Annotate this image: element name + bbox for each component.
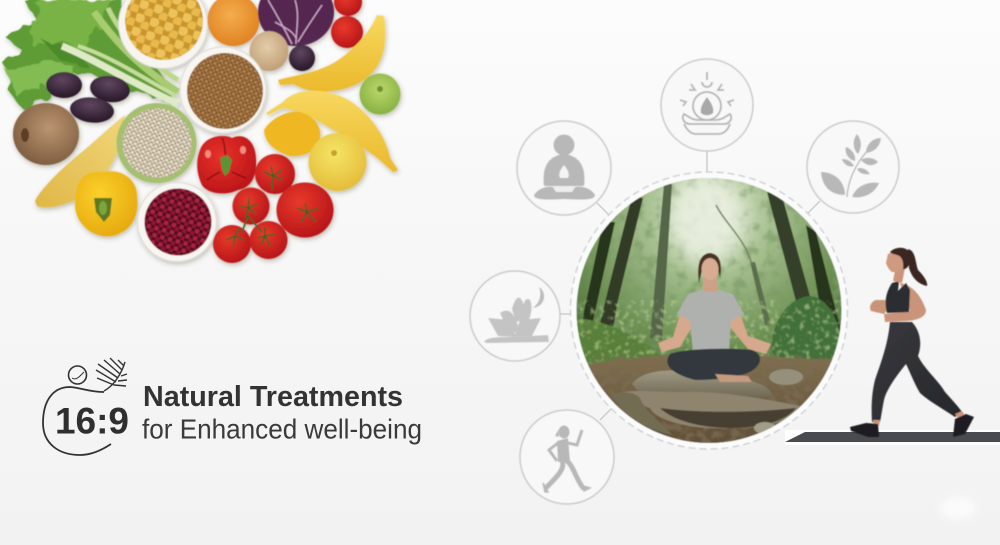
orange	[208, 0, 260, 46]
logo number: 16:9	[55, 400, 129, 442]
tomato stems	[226, 166, 318, 246]
undergrowth left	[576, 318, 658, 364]
walking woman	[850, 248, 974, 437]
green apple	[360, 74, 400, 114]
large tomato	[276, 182, 334, 238]
icon: plant sprig	[807, 121, 899, 213]
shirt	[677, 290, 744, 354]
crossed legs	[667, 349, 760, 380]
dashed ring	[570, 172, 848, 449]
forest backdrop	[570, 170, 850, 450]
heading: Natural Treatments	[143, 381, 403, 413]
tomato 2	[232, 188, 270, 224]
front forearm and fist	[870, 300, 889, 314]
icon: meditating figure with flame	[517, 121, 611, 215]
tree trunks	[578, 184, 842, 340]
icon: flame on lotus bowl	[661, 59, 753, 151]
food arrangement	[4, 0, 400, 263]
back arm	[884, 283, 926, 322]
face	[886, 252, 905, 272]
neck	[893, 266, 905, 283]
tomato 4	[250, 221, 288, 259]
tomato 1	[255, 154, 295, 194]
tomato top 2	[331, 16, 363, 48]
front shoe	[850, 423, 879, 437]
celery stalks	[94, 12, 178, 92]
foot	[715, 374, 752, 382]
crop top	[886, 281, 910, 313]
lettuce	[4, 0, 178, 108]
central forest meditation photo	[570, 170, 850, 450]
leaf texture	[577, 300, 842, 364]
undergrowth right	[772, 296, 840, 360]
lentil bowl	[180, 47, 266, 133]
lower rock	[612, 391, 800, 428]
yellow squash	[264, 112, 320, 156]
rock shadow	[660, 408, 796, 428]
tomato top 1	[334, 0, 362, 16]
icon: lotus and moon	[470, 271, 560, 361]
neck	[703, 278, 717, 292]
plum	[289, 45, 315, 71]
eggplants	[46, 72, 132, 125]
banana top right	[278, 15, 385, 91]
foliage texture	[577, 178, 841, 355]
face	[702, 258, 718, 280]
logo and title	[43, 358, 422, 455]
banana left	[35, 115, 125, 207]
mat	[785, 430, 1000, 445]
palm leaf icon	[96, 358, 127, 391]
kiwi	[13, 103, 79, 165]
right small rock	[769, 369, 803, 385]
faint watermark blob	[940, 497, 976, 519]
misty glow	[668, 175, 744, 265]
green bean bowl	[116, 103, 196, 183]
pomegranate bowl	[138, 182, 216, 262]
chickpea bowl	[118, 0, 208, 68]
yellow bell pepper	[75, 171, 137, 236]
ponytail	[908, 249, 927, 286]
red cabbage	[258, 0, 334, 46]
connector lines	[560, 151, 820, 420]
logo swoosh	[43, 387, 111, 455]
back shoe	[953, 414, 974, 437]
tomato 3	[213, 225, 251, 263]
ankle skin	[873, 411, 966, 426]
photo	[570, 170, 850, 450]
icon: running figure	[520, 410, 614, 504]
hair	[698, 253, 721, 283]
left rock	[612, 392, 672, 435]
meditating woman	[658, 253, 771, 382]
upper rock	[632, 370, 772, 398]
potato	[250, 31, 288, 71]
red bell pepper	[197, 136, 256, 193]
forest floor	[588, 354, 832, 444]
hair	[890, 248, 911, 269]
leggings	[872, 322, 962, 422]
arms	[658, 315, 772, 354]
big banana	[266, 91, 398, 172]
dirt texture	[592, 354, 833, 442]
subheading: for Enhanced well-being	[142, 414, 422, 444]
face circle icon	[68, 366, 86, 384]
yellow apple	[308, 133, 366, 191]
logo mark	[43, 358, 129, 455]
